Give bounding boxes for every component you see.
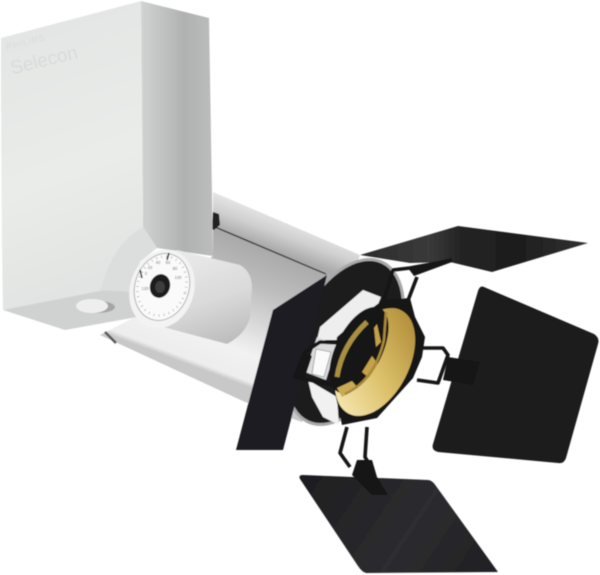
tilt dial: 80 bbox=[173, 266, 178, 271]
lens frame plate bbox=[333, 298, 425, 425]
logo: Selecon bbox=[8, 42, 80, 79]
barn door brackets bbox=[295, 263, 448, 467]
tilt dial bbox=[119, 241, 205, 337]
tilt dial: 60 bbox=[166, 260, 171, 265]
gold reflector bbox=[317, 295, 432, 429]
lamp barrel bbox=[100, 192, 360, 422]
silver ring segments bbox=[305, 290, 381, 425]
bracket box: underside bbox=[3, 289, 137, 330]
barn door: top bbox=[360, 226, 588, 272]
barn door: bottom bbox=[299, 475, 498, 573]
tilt dial: 100 bbox=[174, 275, 182, 280]
foot button bbox=[76, 299, 115, 313]
front ring and dark interior bbox=[262, 241, 428, 443]
pivot collar bbox=[100, 227, 157, 292]
tilt dial: 0 bbox=[145, 271, 148, 276]
logo bbox=[4, 26, 80, 79]
tilt dial: 40 bbox=[156, 260, 161, 265]
tilt dial: 120 bbox=[142, 286, 149, 291]
knuckle cylinder bbox=[163, 250, 252, 344]
barn door: left bbox=[236, 275, 327, 450]
logo: PHILIPS bbox=[5, 33, 46, 52]
barn door: right bbox=[433, 286, 598, 463]
hinge plates bbox=[294, 258, 480, 495]
bracket box: side face bbox=[141, 1, 213, 256]
tilt dial: 20 bbox=[148, 265, 153, 270]
bracket box: front face bbox=[1, 1, 143, 310]
